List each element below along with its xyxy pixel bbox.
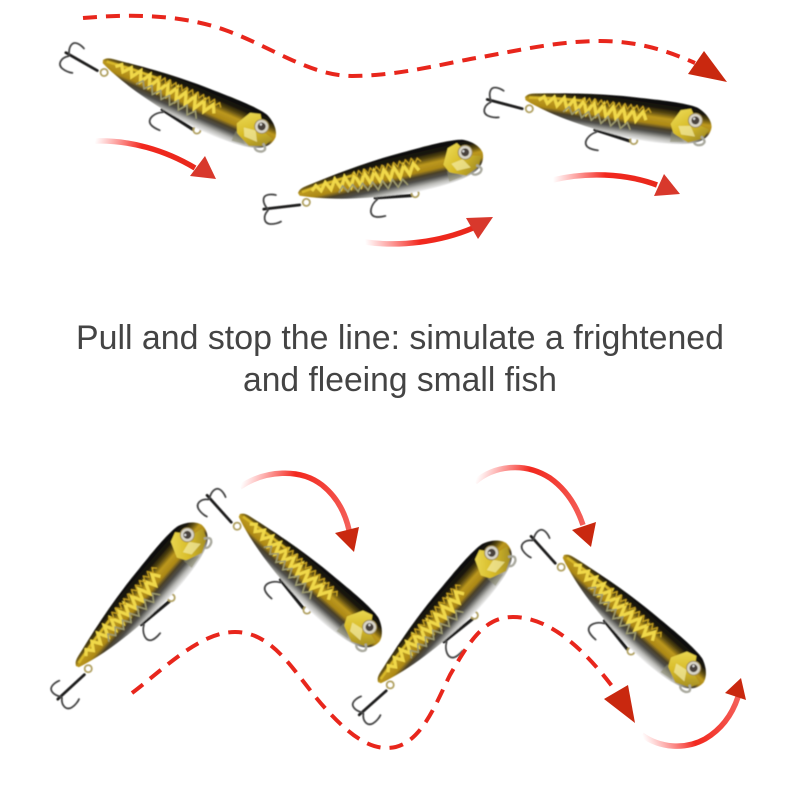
lure: top right [481, 75, 714, 166]
arrow: curved swoosh above second lure [240, 473, 359, 552]
lure: top middle [257, 134, 492, 243]
arrow: swoosh under top right lure [553, 174, 680, 196]
lure: bottom third [340, 530, 536, 739]
lure: bottom second [183, 476, 392, 671]
lure: top left [51, 29, 283, 174]
arrow: curved swoosh above fourth lure [475, 467, 596, 547]
lure: bottom fourth [507, 517, 716, 712]
dashed arrow: top erratic path [83, 16, 727, 82]
caption text: Pull and stop the line: simulate a frightened [76, 319, 724, 357]
lure: bottom first [38, 512, 232, 723]
arrow: swoosh under top left lure [95, 141, 216, 179]
arrow: swoosh under top middle lure [365, 217, 493, 244]
arrow: rising swoosh at bottom right [642, 678, 746, 746]
dashed arrow: bottom zigzag path [132, 617, 635, 748]
caption text: and fleeing small fish [243, 361, 557, 399]
caption text [76, 319, 724, 399]
